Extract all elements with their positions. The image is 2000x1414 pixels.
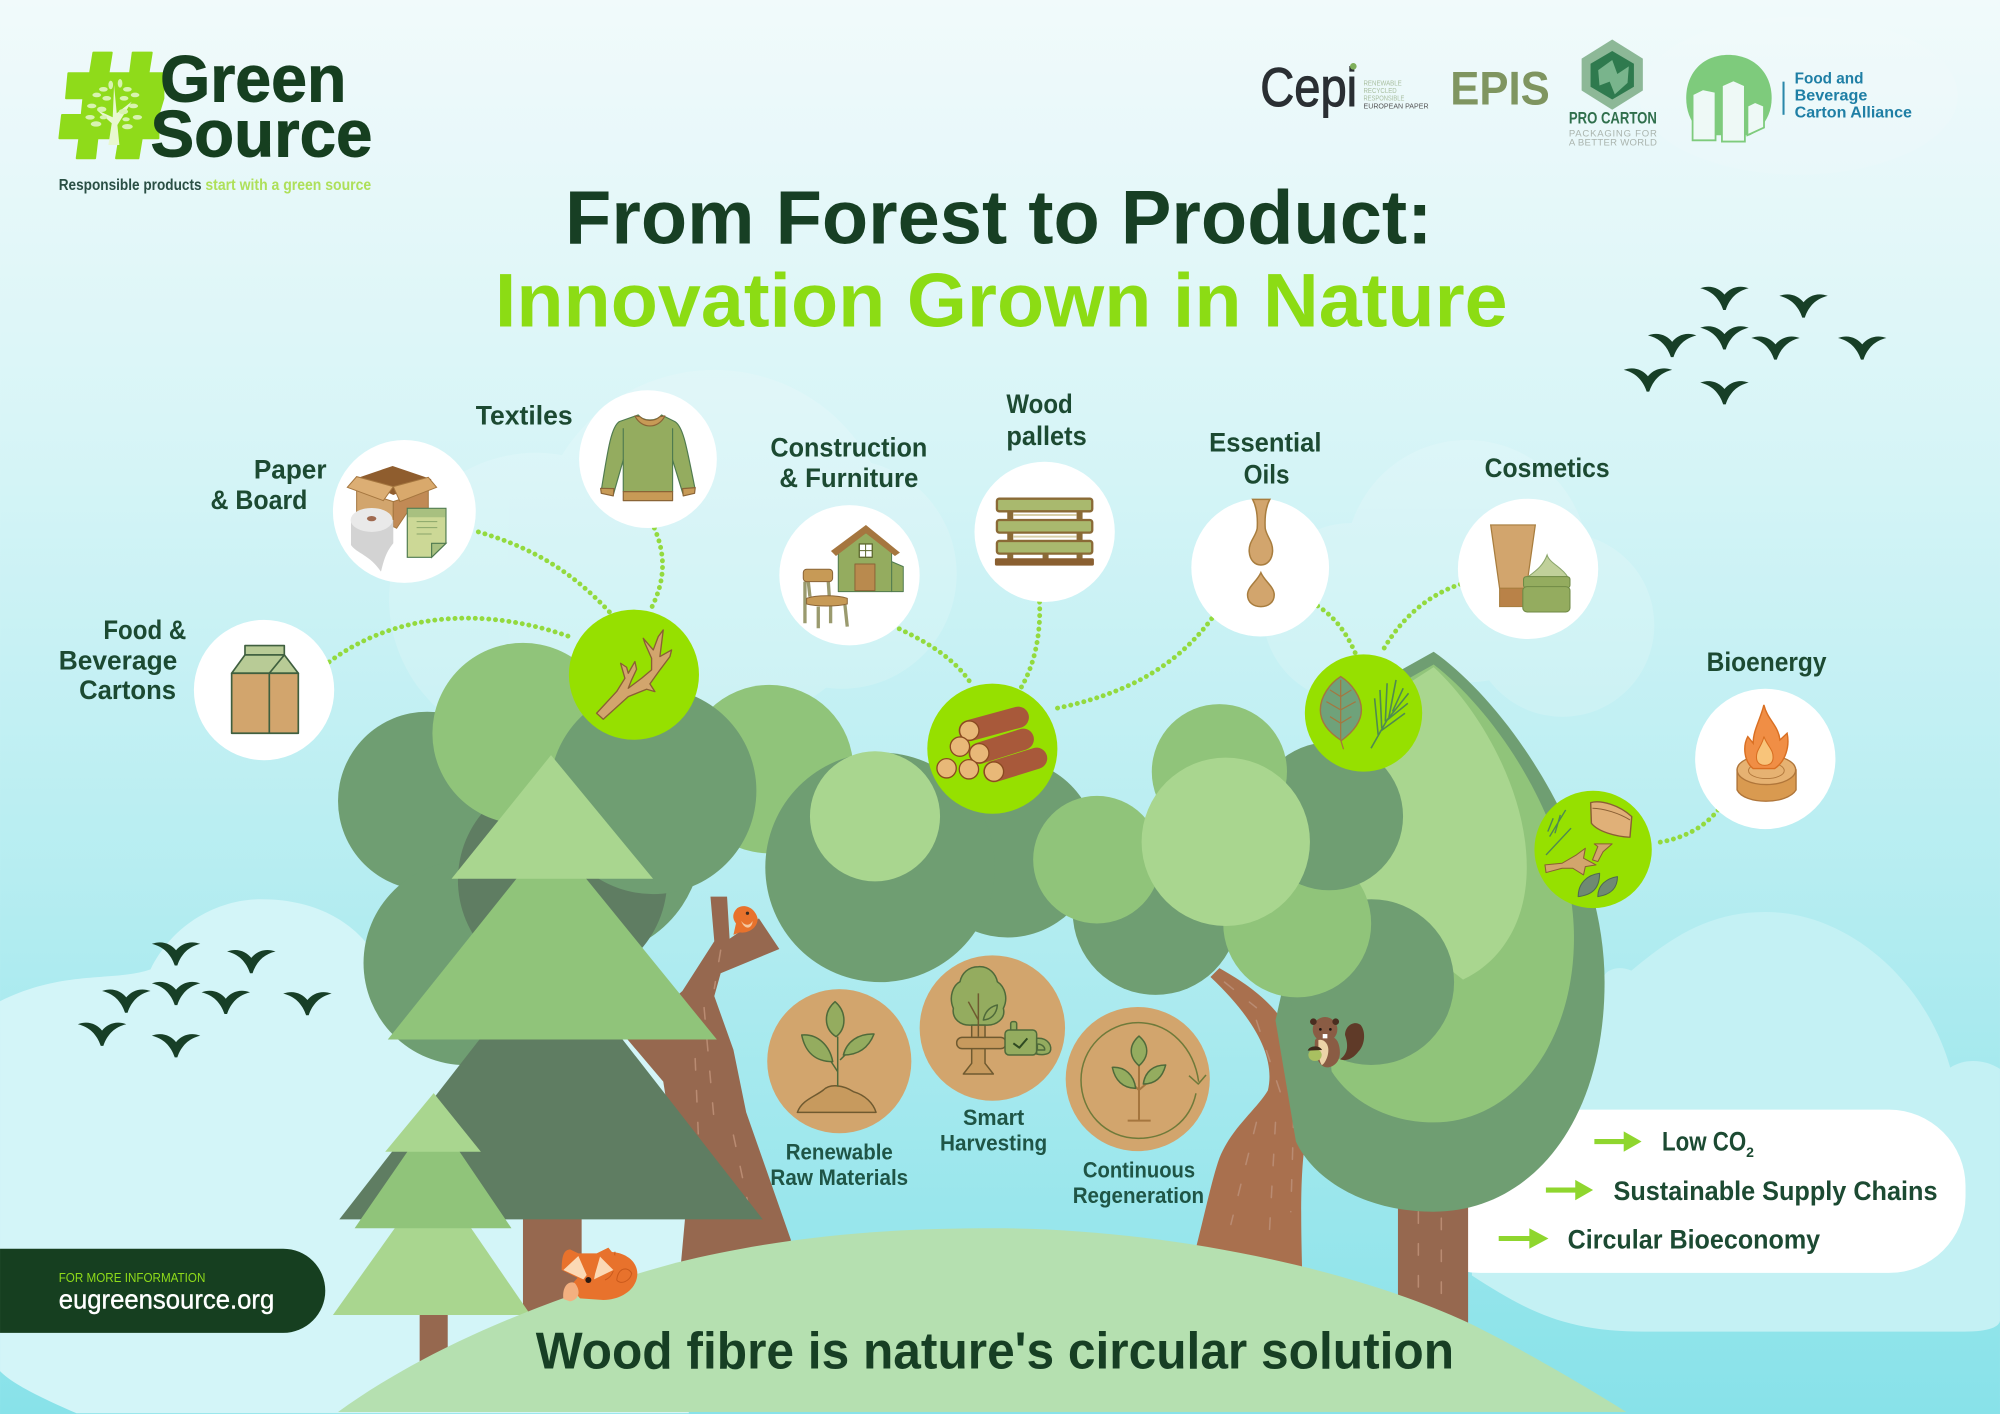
partner logos xyxy=(1260,40,1912,148)
logo: Cepi: RENEWABLE xyxy=(1364,78,1402,87)
hill xyxy=(338,1228,1626,1412)
product: Textiles xyxy=(476,390,717,528)
tree: straight right trunk xyxy=(1398,1186,1468,1327)
label: Continuous xyxy=(1083,1157,1195,1182)
product: Food & Beverage Cartons xyxy=(59,615,334,760)
icon: oil drops xyxy=(1248,499,1274,607)
logo: Cepi xyxy=(1260,56,1429,118)
label: Textiles xyxy=(476,401,573,431)
node: leaves xyxy=(1305,654,1422,772)
logo: Pro Carton: PRO CARTON xyxy=(1569,109,1657,128)
label: Construction xyxy=(770,433,927,463)
tree: right teardrop canopy xyxy=(1276,652,1605,1212)
birds: left flock xyxy=(78,942,332,1057)
icon: tree and chainsaw xyxy=(951,967,1051,1074)
label: Raw Materials xyxy=(770,1165,908,1190)
icon: flame on log xyxy=(1737,705,1796,801)
label xyxy=(1073,1157,1204,1208)
label xyxy=(770,433,927,493)
logo: Cepi: RECYCLED xyxy=(1364,86,1397,95)
label: supply chains: Sustainable Supply Chains xyxy=(1614,1176,1937,1206)
process: Continuous Regeneration xyxy=(1066,1007,1210,1208)
icon: stacked logs xyxy=(937,717,1037,781)
tree: right cluster canopy xyxy=(1033,704,1454,1065)
label xyxy=(210,454,327,515)
icon: stump, branches, leaves xyxy=(1545,802,1632,897)
label: bioeconomy: Circular Bioeconomy xyxy=(1568,1225,1820,1255)
logo: Cepi: EUROPEAN PAPER xyxy=(1364,101,1429,110)
tree: left round canopy xyxy=(338,643,1097,1065)
label xyxy=(1209,428,1321,489)
logo: Pro Carton: PACKAGING FOR xyxy=(1569,128,1657,139)
node: wood residues xyxy=(1534,791,1652,908)
label: Beverage xyxy=(59,646,177,676)
logo: Pro Carton xyxy=(1569,40,1657,148)
icon: sprout in cycle xyxy=(1081,1023,1206,1138)
label xyxy=(940,1105,1047,1155)
label xyxy=(1006,389,1087,451)
wordmark: Source xyxy=(151,98,372,172)
node: logs xyxy=(927,684,1057,814)
closing statement: Wood fibre is nature's circular solution xyxy=(536,1323,1454,1381)
process: Smart Harvesting xyxy=(920,955,1065,1155)
tree: curved right tree trunk xyxy=(1194,968,1332,1275)
label: Smart xyxy=(963,1105,1025,1130)
label: pallets xyxy=(1006,421,1087,451)
label xyxy=(59,615,186,705)
title xyxy=(495,176,1508,344)
tagline: start with a green source xyxy=(205,177,371,194)
dotted connectors xyxy=(329,528,1718,843)
label: Oils xyxy=(1244,459,1290,489)
tree: small pine xyxy=(333,1093,531,1365)
logo: Food and Beverage Carton Alliance: Carton Alliance xyxy=(1795,104,1912,121)
logo: GreenSource xyxy=(59,43,372,194)
animal: squirrel xyxy=(1308,1017,1364,1067)
icon: hash with tree xyxy=(59,53,163,158)
product: Bioenergy xyxy=(1695,647,1835,829)
icon: leaf and pine sprig xyxy=(1320,677,1409,749)
product: Essential Oils xyxy=(1191,428,1329,636)
icon: pallet stack xyxy=(995,499,1094,566)
logo: Food and Beverage Carton Alliance xyxy=(1686,55,1912,142)
label: Harvesting xyxy=(940,1130,1047,1155)
label xyxy=(770,1139,908,1190)
logo: Food and Beverage Carton Alliance: Beverage xyxy=(1795,88,1867,105)
panel: benefits legend text xyxy=(1499,1126,1937,1255)
label: Renewable xyxy=(786,1139,893,1164)
logo: Cepi: RESPONSIBLE xyxy=(1364,94,1404,103)
tree: left round tree trunk xyxy=(628,897,791,1275)
icon: tube and jar xyxy=(1491,525,1570,612)
tree: big pine xyxy=(339,755,763,1320)
panel: benefits legend xyxy=(1403,1110,1966,1273)
label: Essential xyxy=(1209,428,1321,458)
arrow: supply chains xyxy=(1546,1180,1593,1200)
animal: fox xyxy=(562,1248,637,1301)
label: Wood xyxy=(1006,389,1073,419)
label: Regeneration xyxy=(1073,1183,1204,1208)
logo: EPIS: EPIS xyxy=(1450,63,1550,116)
icon: carton xyxy=(232,646,298,733)
wordmark xyxy=(151,43,372,172)
label: Paper xyxy=(254,454,327,484)
icon: sprout xyxy=(797,1002,876,1112)
label: Low CO2: Low CO xyxy=(1662,1126,1746,1156)
label: Cosmetics xyxy=(1485,453,1610,483)
label: Food & xyxy=(103,615,186,645)
url: eugreensource.org xyxy=(59,1285,274,1315)
wordmark: Green xyxy=(160,43,346,117)
icon: branch xyxy=(597,630,672,719)
label: Bioenergy xyxy=(1707,647,1827,677)
icon: house and chair xyxy=(803,525,903,628)
tagline: Responsible products xyxy=(59,177,202,194)
label: Low CO2: 2 xyxy=(1746,1144,1754,1160)
small heading: FOR MORE INFORMATION xyxy=(59,1270,205,1285)
label: & Board xyxy=(210,485,307,515)
arrow: low CO2 xyxy=(1594,1131,1642,1152)
label: Cartons xyxy=(79,675,176,705)
icon: box, roll and note xyxy=(347,466,446,572)
node: branch xyxy=(569,610,699,740)
birds: top right flock xyxy=(1624,287,1886,404)
label: & Furniture xyxy=(779,463,918,493)
arrow: bioeconomy xyxy=(1499,1228,1548,1249)
logo: Food and Beverage Carton Alliance: Food and xyxy=(1795,71,1864,88)
icon: sweater xyxy=(601,415,695,501)
product: Paper & Board xyxy=(210,440,476,583)
animal: bird xyxy=(733,906,758,935)
product: Construction & Furniture xyxy=(770,433,927,645)
title: From Forest to Product: xyxy=(565,176,1432,261)
logo: Cepi: Cepi xyxy=(1260,56,1357,118)
process: Renewable Raw Materials xyxy=(767,989,911,1190)
product: Cosmetics xyxy=(1458,453,1610,639)
product: Wood pallets xyxy=(974,389,1115,602)
logo: Pro Carton: A BETTER WORLD xyxy=(1569,137,1657,148)
title: Innovation Grown in Nature xyxy=(495,259,1508,344)
panel: more information xyxy=(0,1249,325,1333)
